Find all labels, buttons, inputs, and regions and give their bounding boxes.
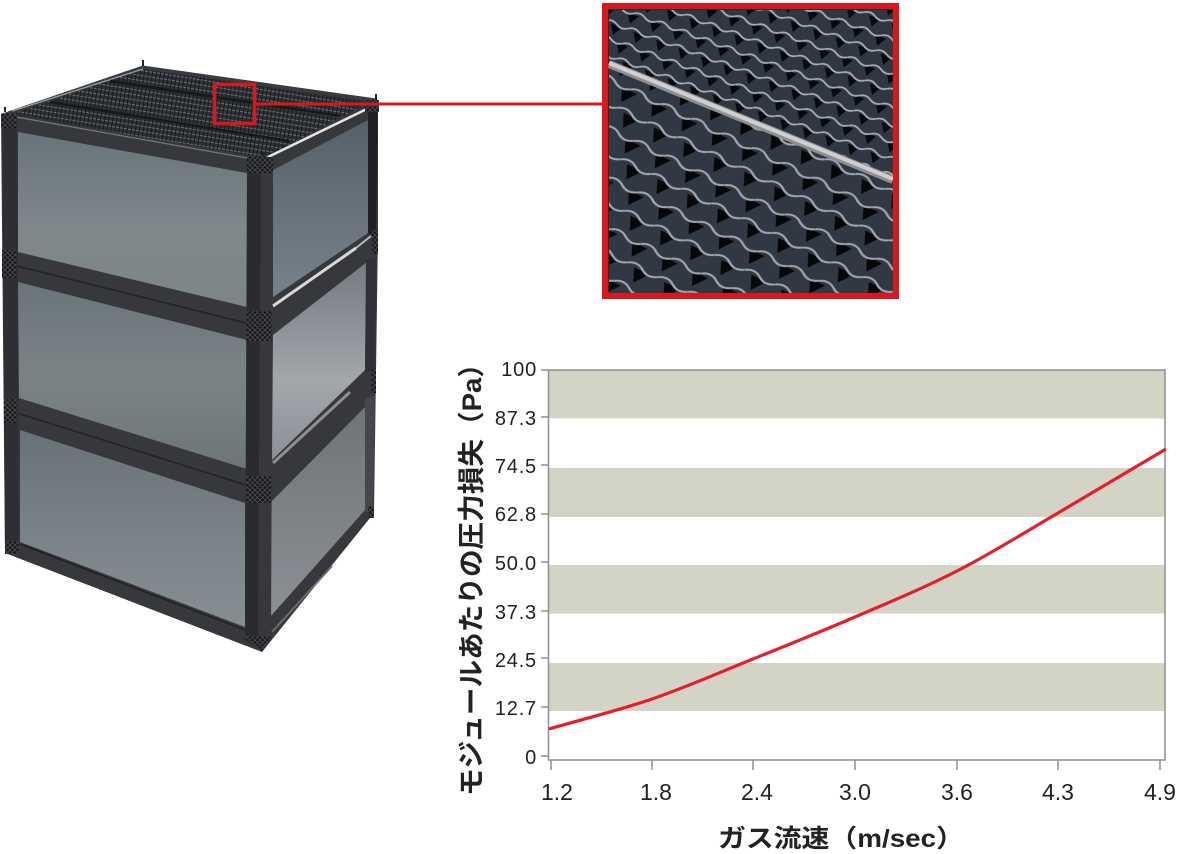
x tick labels: 2.4 (741, 779, 773, 805)
y tick labels: 37.3 (495, 602, 537, 624)
x tick labels: 4.9 (1144, 779, 1176, 805)
x tick labels: 3.6 (941, 779, 973, 805)
y tick labels: 24.5 (495, 650, 537, 672)
x tick labels: 4.3 (1042, 779, 1074, 805)
y tick labels: 87.3 (495, 408, 537, 430)
callout: red marker on module (214, 84, 254, 124)
y tick labels: 100 (501, 359, 537, 381)
x tick labels (541, 779, 1176, 805)
x tick labels: 1.8 (640, 779, 672, 805)
top frame edges (5, 60, 376, 158)
module silhouette (1, 66, 378, 652)
chart: pressure loss vs gas velocity (457, 350, 1176, 853)
lower mesh (609, 63, 893, 293)
top mesh surface (12, 69, 370, 158)
curve (549, 449, 1166, 729)
y tick labels: 50.0 (495, 553, 537, 575)
red border (605, 6, 896, 296)
inset background (605, 6, 896, 296)
right panels (270, 120, 368, 617)
y tick labels: 12.7 (495, 698, 537, 720)
y tick labels: 0 (525, 747, 537, 769)
left panels (18, 132, 247, 627)
photo: stacked filter module (1, 60, 379, 652)
y tick labels: 62.8 (495, 504, 537, 526)
chart bands (549, 370, 1165, 711)
upper mesh (609, 10, 893, 180)
y axis title: モジュールあたりの圧力損失（Pa） (457, 350, 487, 796)
x tick labels: 3.0 (839, 779, 871, 805)
y tick labels (495, 359, 537, 769)
metal rod (609, 63, 893, 180)
x axis title: ガス流速（m/sec） (718, 825, 964, 853)
x tick labels: 1.2 (541, 779, 573, 805)
callout: connector line (255, 102, 603, 106)
frame posts (2, 104, 378, 648)
chart axes (541, 370, 1165, 770)
rail details (17, 236, 371, 632)
inset photo: corrugated media close-up (605, 6, 896, 296)
y tick labels: 74.5 (495, 456, 537, 478)
corner nodes (1, 100, 379, 652)
